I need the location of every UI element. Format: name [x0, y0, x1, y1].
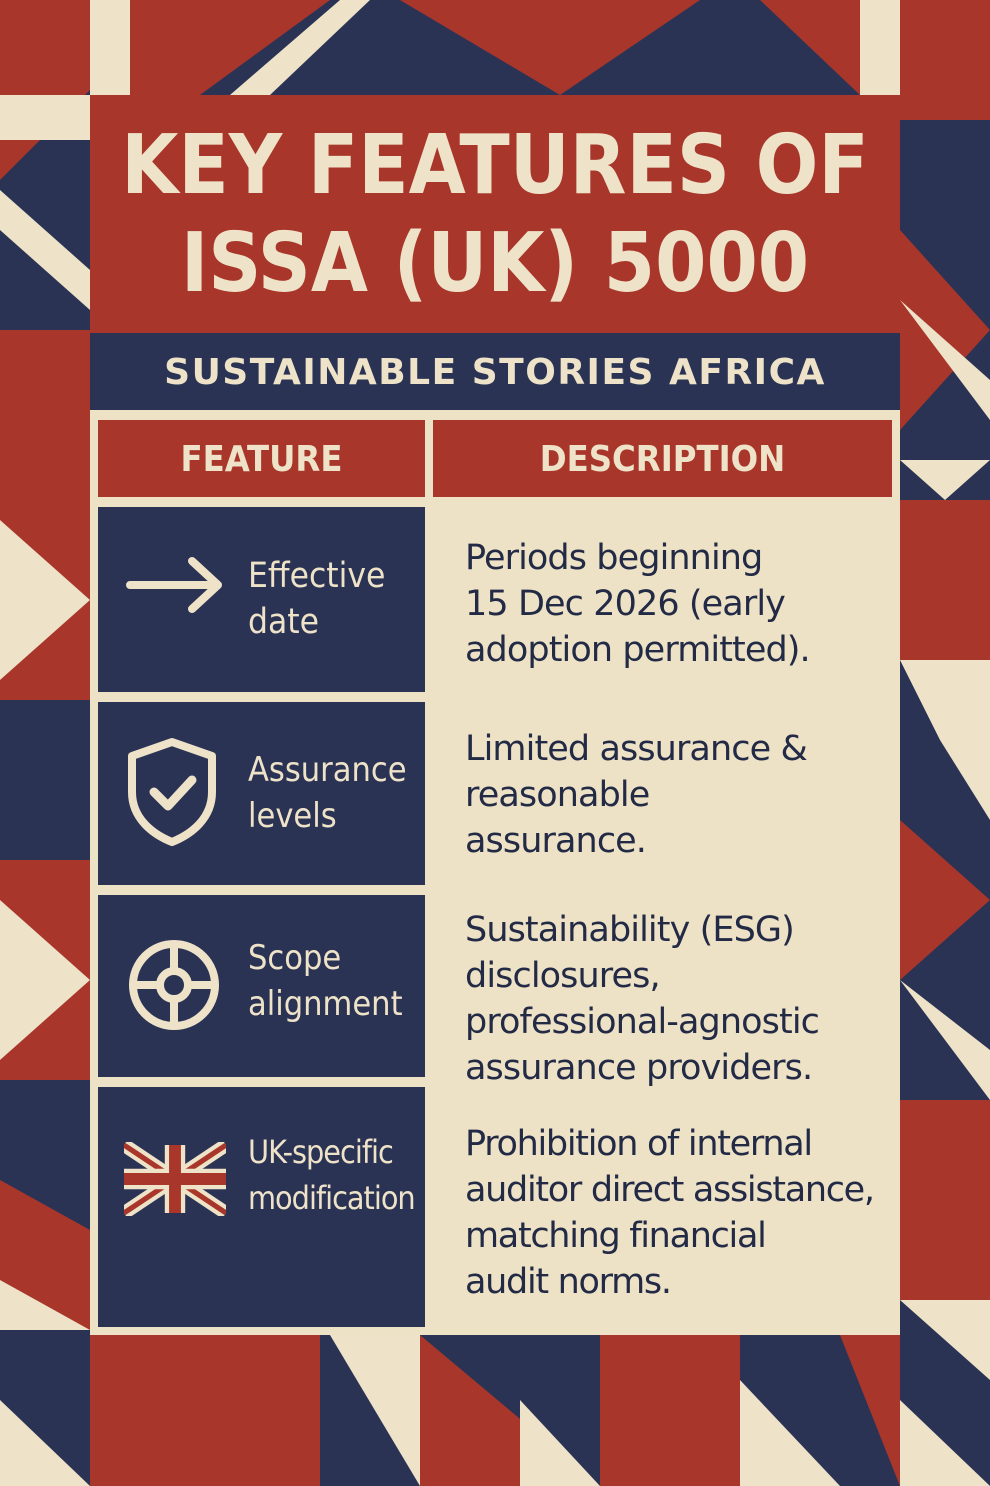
header: feature [98, 420, 425, 497]
row 3 description: Sustainability (ESG) [465, 910, 794, 950]
subtitle: SUSTAINABLE STORIES AFRICA [164, 352, 826, 393]
row 3 description: professional-agnostic [465, 1002, 819, 1042]
row 3 description: assurance providers. [465, 1048, 812, 1088]
row 1 description: adoption permitted). [465, 630, 810, 670]
row 1 description [465, 538, 810, 670]
row 4 description: Prohibition of internal [465, 1124, 812, 1164]
row 2 feature [98, 702, 425, 885]
row 4 description: matching financial [465, 1216, 766, 1256]
header: description [433, 420, 892, 497]
title: ISSA (UK) 5000 [181, 216, 809, 311]
row 2 feature: levels [248, 796, 337, 836]
row 4 feature: UK-specific [248, 1133, 393, 1171]
row 2 description: reasonable [465, 775, 649, 815]
title [90, 95, 900, 333]
row 1 feature: Effective [248, 556, 385, 596]
row 1 description: Periods beginning [465, 538, 762, 578]
row 4 description: audit norms. [465, 1262, 671, 1302]
header: feature: FEATURE [180, 439, 342, 480]
row 3 feature: alignment [248, 984, 403, 1024]
icon: UK flag [124, 1142, 226, 1216]
icon: shield [128, 738, 216, 846]
row 2 description: assurance. [465, 821, 646, 861]
header: description: DESCRIPTION [540, 439, 785, 480]
row 3 feature: Scope [248, 938, 341, 978]
row 4 description: auditor direct assistance, [465, 1170, 874, 1210]
row 1 feature [98, 507, 425, 692]
row 2 feature: Assurance [248, 750, 407, 790]
table [90, 410, 900, 1335]
title: KEY FEATURES OF [121, 118, 869, 213]
icon: arrow [126, 557, 222, 613]
row 2 description [465, 729, 807, 861]
row 1 description: 15 Dec 2026 (early [465, 584, 785, 624]
icon: target [129, 940, 219, 1030]
row 2 description: Limited assurance & [465, 729, 807, 769]
row 4 feature: modification [248, 1179, 415, 1217]
row 3 feature [98, 895, 425, 1077]
row 1 feature: date [248, 602, 319, 642]
row 4 description [465, 1124, 874, 1302]
row 4 feature [98, 1087, 425, 1327]
row 3 description: disclosures, [465, 956, 660, 996]
row 3 description [465, 910, 819, 1088]
subtitle [90, 333, 900, 410]
